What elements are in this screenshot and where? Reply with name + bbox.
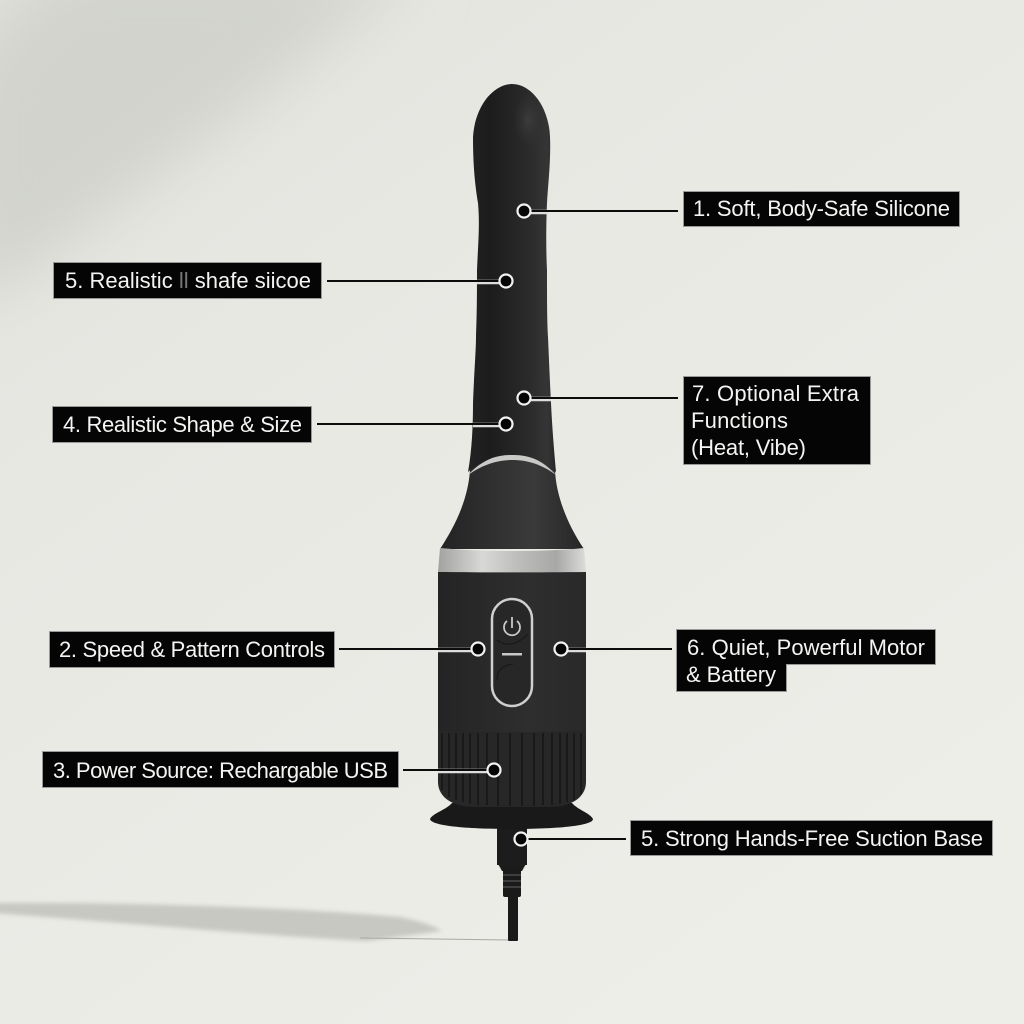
callout 7: (Heat, Vibe)	[691, 435, 806, 460]
tip highlight	[513, 92, 543, 148]
callout 5 base: 5. Strong Hands-Free Suction Base	[641, 826, 983, 851]
callout 6: & Battery	[686, 662, 776, 687]
ribbed collar	[438, 727, 586, 807]
callout 5 shaft	[54, 262, 512, 298]
metal ring	[438, 548, 586, 572]
callout 3	[42, 752, 500, 788]
callout 3: 3. Power Source: Rechargable USB	[53, 758, 388, 783]
callout 7: 7. Optional Extra	[692, 381, 860, 406]
callout 4: 4. Realistic Shape & Size	[63, 412, 302, 437]
callout 7	[518, 376, 870, 464]
cast shadow	[0, 903, 510, 941]
cable	[497, 826, 527, 941]
callout 1: 1. Soft, Body-Safe Silicone	[693, 196, 950, 221]
icon: power	[504, 617, 520, 635]
callout 5 base	[514, 820, 992, 856]
shaft	[468, 84, 556, 472]
suction base	[430, 803, 593, 829]
callout 6: 6. Quiet, Powerful Motor	[687, 635, 925, 660]
callout 6	[554, 630, 936, 692]
callout 4	[52, 406, 512, 442]
callout 2: 2. Speed & Pattern Controls	[59, 637, 325, 662]
callout 2	[50, 632, 484, 668]
callout 1	[518, 192, 960, 226]
product illustration	[430, 84, 593, 941]
callout 5 shaft: 5. Realistic ll shafe siicoe	[65, 268, 311, 293]
control pill	[492, 599, 532, 706]
metal neck ring	[468, 455, 556, 475]
callout 7: Functions	[691, 408, 788, 433]
main body	[438, 572, 586, 732]
neck	[440, 456, 584, 549]
